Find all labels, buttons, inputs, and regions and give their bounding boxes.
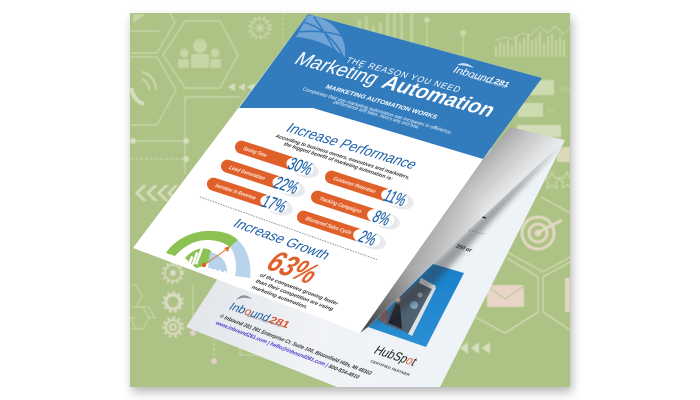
intro text: Companies that use marketing automation see increases in efficiency, — [301, 87, 453, 136]
stat pill: lead generation 22% — [218, 155, 308, 201]
logo: Inbound 281 white: MARKET YOUR WAY UP — [469, 76, 508, 89]
chart: growth gauge — [166, 231, 250, 278]
stat pill: shortened sales cycle 2%: 2% — [355, 227, 380, 249]
gauge arrow — [202, 246, 230, 267]
stat pill: increase in revenue 17% — [204, 173, 296, 219]
stat pill: customer retention 11%: Customer Retention — [331, 176, 377, 195]
performance description: the biggest benefit of marketing automation is: — [282, 142, 394, 182]
stat pill: tracking campaigns 8% — [308, 186, 403, 233]
background icons — [130, 13, 575, 364]
subheading: marketing automation works: MARKETING AUTOMATION WORKS — [324, 84, 439, 121]
heading: automation: Automation — [377, 71, 501, 121]
header band — [239, 14, 542, 159]
heading: increase growth: Increase Growth — [229, 217, 333, 263]
lower dots — [190, 330, 217, 364]
stat pill: tracking campaigns 8%: 8% — [369, 207, 394, 229]
stat: 63%: 63% — [259, 245, 327, 290]
chart: right horizontal bars — [517, 80, 571, 162]
icon: globe graphic — [296, 15, 346, 57]
stat pill: customer retention 11%: 11% — [380, 186, 410, 210]
growth description: of the companies growing faster — [258, 273, 340, 307]
logo: Inbound 281: Inbound — [226, 301, 273, 324]
circuit nodes — [130, 138, 189, 162]
logo: Inbound 281 white — [450, 63, 513, 89]
circuit lines — [130, 13, 283, 361]
fold shadow on the back page — [360, 140, 565, 333]
pins — [424, 18, 466, 55]
icon: target hexagon — [507, 197, 570, 272]
logo: HubSpot certified partner: HubSpot — [371, 343, 420, 369]
chart: top right bars and line — [495, 26, 570, 57]
background panel: green technology pattern — [130, 13, 575, 392]
heading: the reason you need: THE REASON YOU NEED — [344, 55, 463, 94]
chart: top centre bars — [358, 13, 413, 43]
icon: gear top — [249, 17, 271, 39]
stat pill: shortened sales cycle 2%: Shortened Sales Cycle — [303, 216, 353, 236]
logo: Inbound 281 white: Inbound — [450, 65, 496, 86]
stat pill: increase in revenue 17%: Increase in Revenue — [213, 183, 257, 201]
chart: right horizontal bars: 8% — [547, 109, 555, 115]
icon: people hexagon — [163, 21, 238, 88]
icon: gears lower left — [163, 263, 183, 336]
icon: small hexagon cluster — [130, 285, 155, 329]
panel: folded page corner — [360, 127, 565, 333]
logo: Inbound 281: MARKET YOUR WAY UP — [245, 314, 283, 328]
panel: back page of brochure — [186, 140, 565, 387]
stat pill: lead generation 22%: Lead Generation — [227, 165, 267, 182]
icon: stars — [544, 172, 575, 188]
lower left rectangle outline — [240, 347, 260, 355]
stat pill: lead generation 22%: 22% — [270, 173, 302, 198]
stat pill: saving time 30%: 30% — [284, 154, 316, 179]
logo: HubSpot certified partner: CERTIFIED PARTNER — [369, 360, 411, 377]
logo: Inbound 281 white: 281 — [492, 77, 513, 89]
intro text: performance and sales. Here's why and how. — [332, 100, 421, 130]
back page text fragments: 350 or — [454, 244, 474, 254]
stat pill: shortened sales cycle 2% — [294, 206, 389, 253]
contact address: © Inbound 281 281 Enterprise Ct. Suite 100, Bloomfield Hills, MI 48302 — [218, 313, 374, 377]
panel: front page of brochure — [133, 14, 542, 333]
chart: right horizontal bars: 12% — [560, 87, 571, 93]
heading: marketing: Marketing — [290, 49, 384, 89]
icon: triangles right — [460, 342, 490, 354]
heading: increase performance: Increase Performance — [282, 120, 421, 173]
growth description: than their competition are using — [254, 279, 335, 312]
image: blue photo with book — [368, 264, 464, 347]
stat pill: tracking campaigns 8%: Tracking Campaigns — [317, 196, 363, 215]
brochure — [133, 14, 565, 387]
icon: chevron arrows left — [135, 83, 254, 201]
icon: email hexagon — [475, 258, 538, 333]
logo: Inbound 281: 281 — [266, 315, 292, 331]
stat pill: customer retention 11% — [322, 166, 417, 213]
contact links: www.inbound281.com | hello@inbound281.com | 800-834-4910 — [213, 321, 361, 380]
stat pill: increase in revenue 17%: 17% — [258, 192, 290, 216]
back page text fragments — [454, 215, 486, 254]
growth description: marketing automation. — [250, 285, 310, 310]
logo: Inbound 281 — [226, 295, 292, 331]
stat pill: saving time 30%: Saving Time — [241, 146, 268, 159]
stat pill: saving time 30% — [232, 136, 322, 182]
icon: phone hexagon — [130, 13, 176, 125]
icon: play triangle — [133, 14, 146, 23]
performance description: According to business owners, executives and marketers, — [274, 134, 412, 181]
icon: third hexagon — [543, 262, 570, 330]
